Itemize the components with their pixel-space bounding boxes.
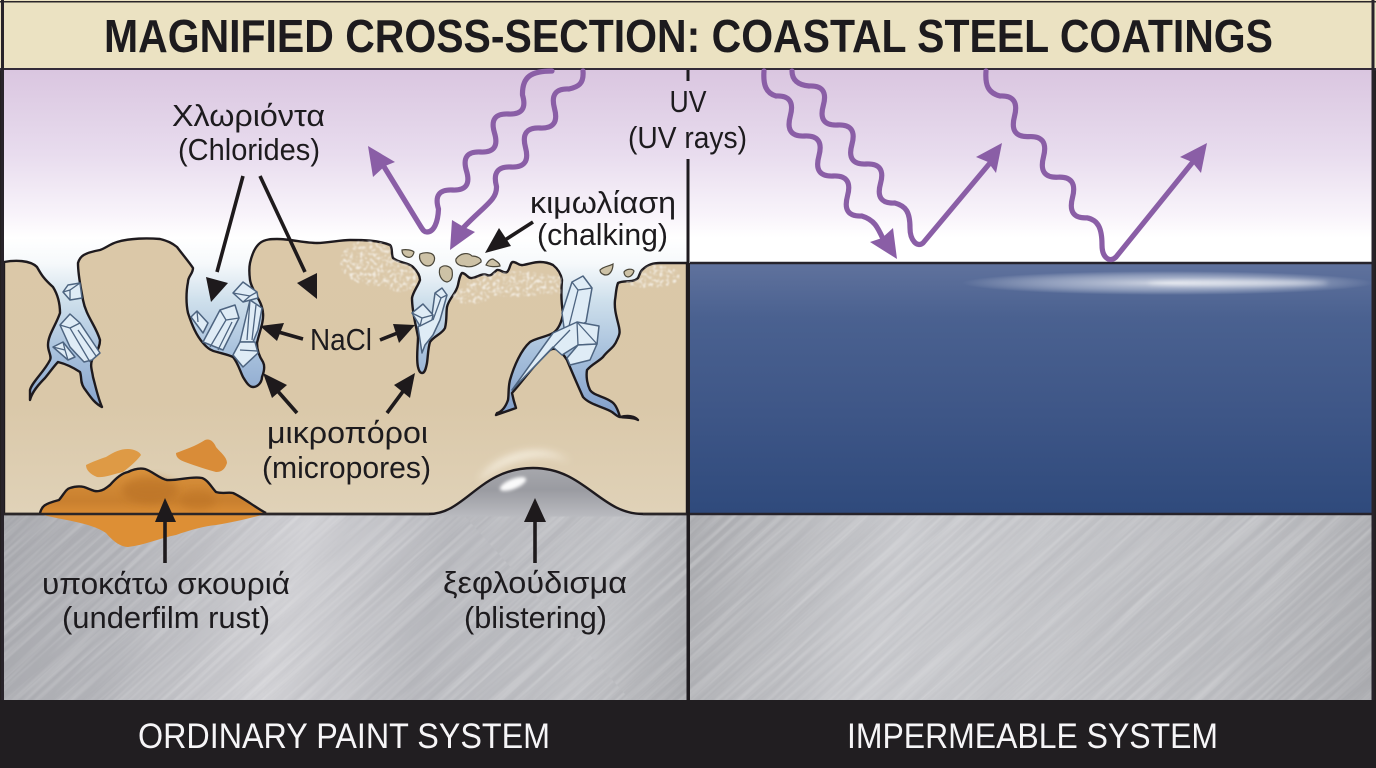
steel line left: [4, 513, 688, 515]
steel substrate left: [4, 514, 688, 700]
panel: impermeable system: [688, 70, 1374, 700]
pore crystals: far-left pore: [53, 283, 100, 362]
arrow: blistering: [524, 498, 546, 563]
label: blistering: ξεφλούδισμα: [443, 565, 627, 600]
arrow: chalking: [485, 222, 533, 253]
label: UV rays: (UV rays): [628, 120, 747, 155]
layer lines: [690, 263, 1372, 514]
arrow: chlorides to paint: [260, 176, 317, 299]
label: underfilm rust: [42, 566, 290, 635]
label: underfilm rust: (underfilm rust): [62, 600, 270, 635]
gloss highlight: [962, 271, 1374, 295]
arrow: NaCl right: [380, 324, 415, 343]
label: UV rays: [628, 84, 747, 155]
label: chalking: (chalking): [537, 217, 668, 252]
underfilm rust: mound: [40, 469, 266, 547]
impermeable coating layer: [690, 263, 1372, 514]
sky gradient left: [4, 70, 690, 263]
label: micropores: [262, 415, 431, 485]
footer label: impermeable: IMPERMEABLE SYSTEM: [847, 717, 1218, 756]
label: NaCl: NaCl: [310, 322, 372, 357]
chalk particles: [402, 250, 634, 282]
paint layer with pores: [4, 238, 687, 514]
label: blistering: [443, 565, 627, 635]
underfilm rust: flakes: [86, 439, 227, 477]
arrow: NaCl left: [260, 323, 303, 341]
panel: ordinary paint system: [4, 70, 690, 700]
label: chalking: [530, 185, 676, 252]
label: underfilm rust: υποκάτω σκουριά: [42, 566, 290, 601]
arrow: micropores right: [387, 373, 415, 413]
arrow: chlorides to pore: [206, 176, 243, 302]
centre divider: [686, 70, 690, 700]
pore crystals: central pore: [412, 288, 447, 353]
label: micropores: (micropores): [262, 450, 431, 485]
footer label: ordinary: ORDINARY PAINT SYSTEM: [138, 717, 550, 756]
UV rays: impermeable: [764, 71, 1207, 260]
label: micropores: μικροπόροι: [267, 415, 428, 450]
title banner: [0, 0, 1376, 70]
pore fill behind paint: [4, 238, 688, 428]
pore crystals: chloride pore: [191, 282, 262, 367]
steel substrate right: [690, 514, 1372, 700]
label: chlorides: [172, 98, 325, 167]
label: blistering: (blistering): [464, 600, 607, 635]
pore crystals: right pore: [512, 276, 599, 390]
blister: [429, 451, 643, 516]
label: chlorides: (Chlorides): [178, 132, 320, 167]
label: chlorides: Χλωριόντα: [172, 98, 325, 133]
footer bar: [0, 700, 1376, 768]
arrow: micropores left: [263, 373, 297, 413]
sky gradient right: [688, 70, 1372, 263]
label: chalking: κιμωλίαση: [530, 185, 676, 220]
chalky degraded surface: [340, 238, 680, 304]
arrow: underfilm rust: [155, 498, 176, 563]
label: UV rays: UV: [670, 84, 707, 119]
UV rays: ordinary paint: [368, 71, 583, 250]
